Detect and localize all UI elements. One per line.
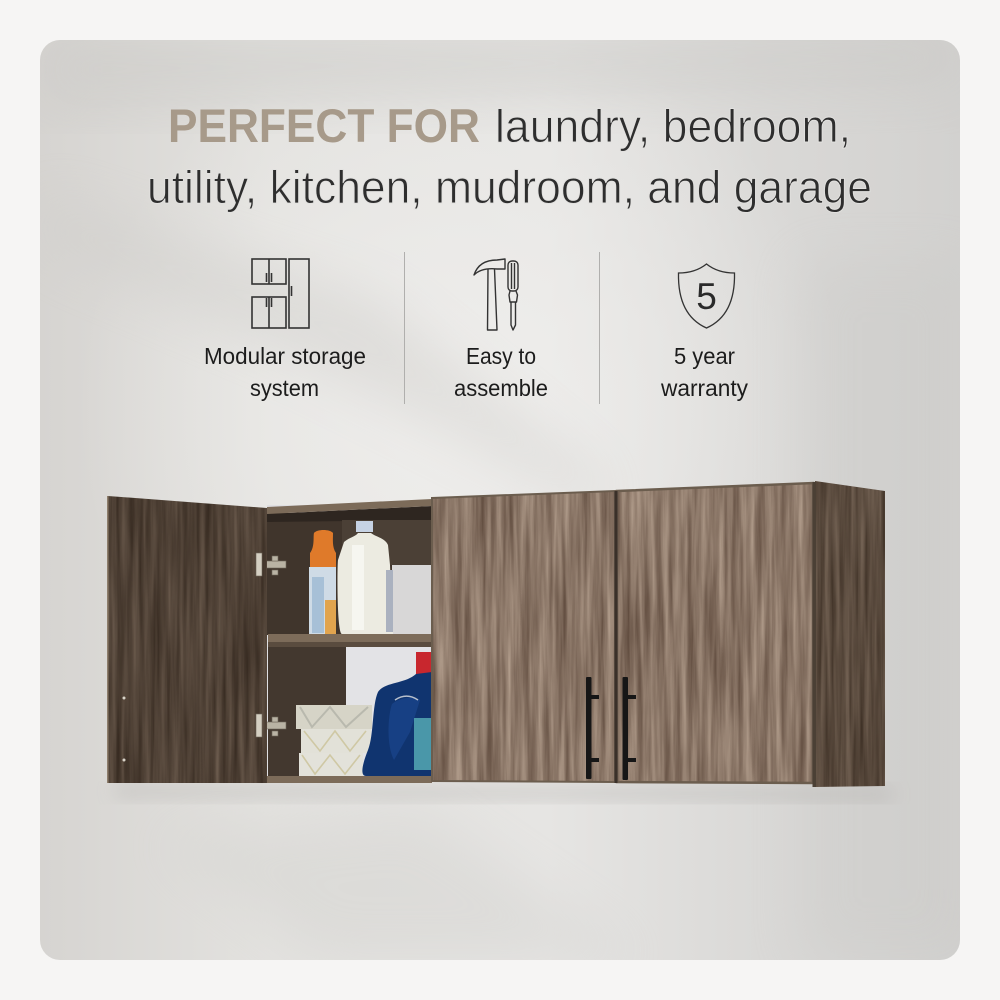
label: easy to assemble: Easy to — [466, 343, 536, 369]
open door — [107, 490, 268, 785]
divider — [404, 252, 405, 404]
cabinet side — [812, 478, 886, 789]
icon: cabinets — [252, 259, 309, 328]
air freshener can — [309, 530, 336, 636]
hinge plates — [256, 553, 262, 737]
label: 5 year warranty: 5 year — [674, 343, 735, 369]
label: modular storage system: Modular storage — [204, 343, 366, 369]
tissue boxes — [296, 705, 372, 776]
heading: laundry, bedroom, — [495, 100, 851, 152]
white bottle — [337, 521, 393, 634]
label: easy to assemble — [454, 343, 548, 401]
label: easy to assemble: assemble — [454, 375, 548, 401]
hinge arms — [262, 556, 286, 736]
center door — [432, 488, 616, 784]
label: 5 year warranty — [660, 343, 748, 401]
shelf — [268, 634, 432, 647]
label: modular storage system: system — [250, 375, 319, 401]
label: modular storage system — [204, 343, 366, 401]
right door — [617, 480, 814, 784]
feature: 5 year warranty — [660, 264, 748, 401]
cabinet top and bottom boards — [267, 499, 432, 783]
heading — [147, 99, 872, 213]
door gap — [614, 491, 618, 783]
icon: shield with 5: 5 — [696, 276, 717, 317]
handle: right door — [622, 677, 636, 780]
label: 5 year warranty: warranty — [660, 375, 748, 401]
wall cabinet — [107, 478, 886, 789]
blue detergent jug — [362, 652, 432, 776]
heading: PERFECT FOR — [168, 99, 480, 152]
handle: center door — [586, 677, 599, 779]
icon: hammer and screwdriver — [474, 259, 518, 330]
cabinet interior — [267, 505, 432, 780]
feature: easy to assemble — [454, 259, 548, 401]
feature: modular storage system — [204, 259, 366, 401]
heading: utility, kitchen, mudroom, and garage — [147, 161, 872, 213]
divider — [599, 252, 600, 404]
